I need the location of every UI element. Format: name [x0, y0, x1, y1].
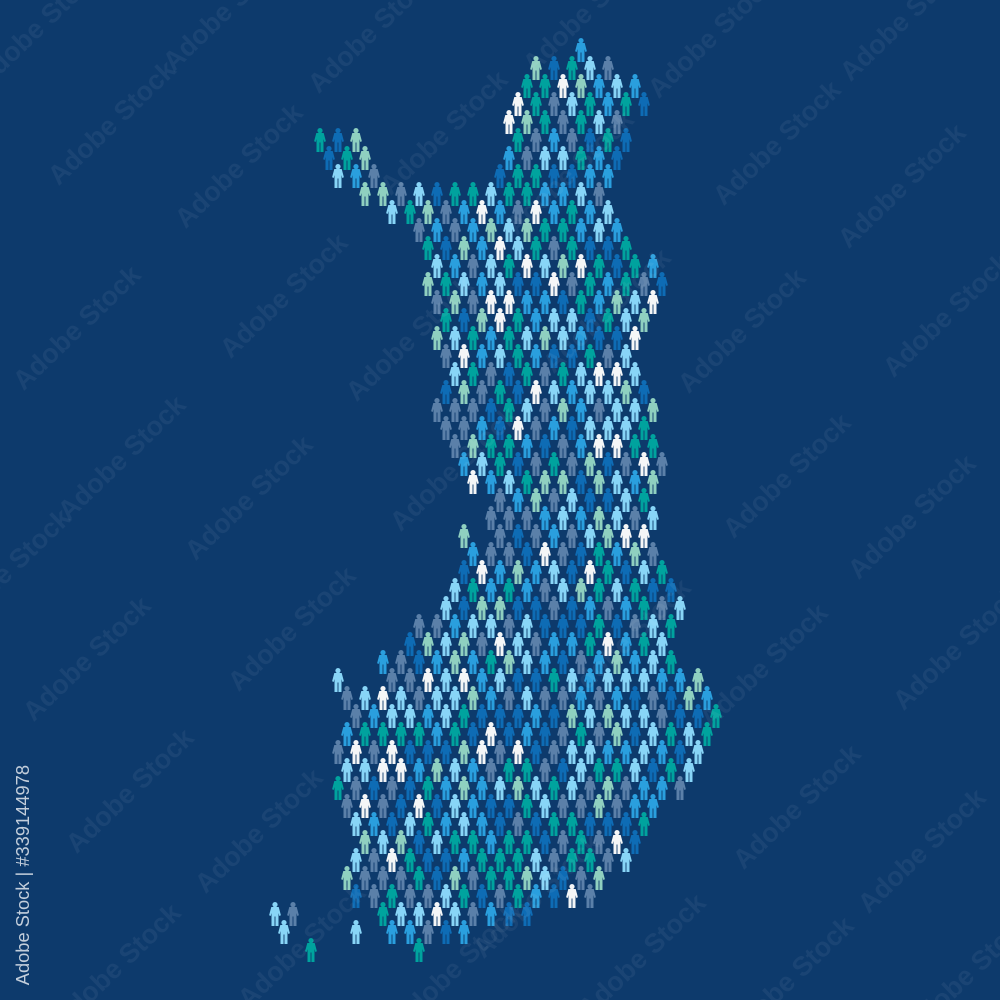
watermarks: Adobe Stock [60, 722, 200, 859]
watermarks: Adobe Stock [169, 97, 309, 234]
watermarks: Adobe Stock [42, 54, 182, 191]
watermarks: Adobe Stock [17, 590, 157, 727]
watermarks: Adobe Stock [7, 259, 147, 396]
watermarks: Adobe Stock [707, 74, 847, 211]
mainland people [314, 38, 722, 962]
watermarks: Adobe Stock [467, 827, 607, 964]
watermarks: Adobe Stock [189, 762, 329, 899]
islands [269, 902, 317, 962]
watermarks: Adobe Stock [842, 448, 982, 585]
watermarks: Adobe Stock [717, 407, 857, 544]
watermarks: Adobe Stock [557, 572, 697, 709]
watermarks: Adobe Stock [214, 227, 354, 364]
map of Finland made of people pictograms [269, 38, 722, 962]
watermarks: Adobe Stock [727, 738, 867, 875]
watermarks: Adobe Stock [340, 270, 480, 407]
watermarks: Adobe Stock [179, 429, 319, 566]
watermarks: Adobe Stock [500, 104, 640, 241]
watermarks: Adobe Stock [694, 597, 834, 734]
watermarks: Adobe Stock [374, 64, 514, 201]
watermarks: Adobe Stock [52, 389, 192, 526]
watermarks: Adobe Stock [672, 262, 812, 399]
side credit text: Adobe Stock | #339144978 [12, 765, 33, 985]
watermarks: Adobe Stock [537, 242, 677, 379]
watermarks: Adobe Stock [852, 782, 992, 919]
watermarks: Adobe Stock [222, 560, 362, 697]
watermarks: Adobe Stock [384, 400, 524, 537]
watermarks: Adobe Stock [832, 117, 972, 254]
